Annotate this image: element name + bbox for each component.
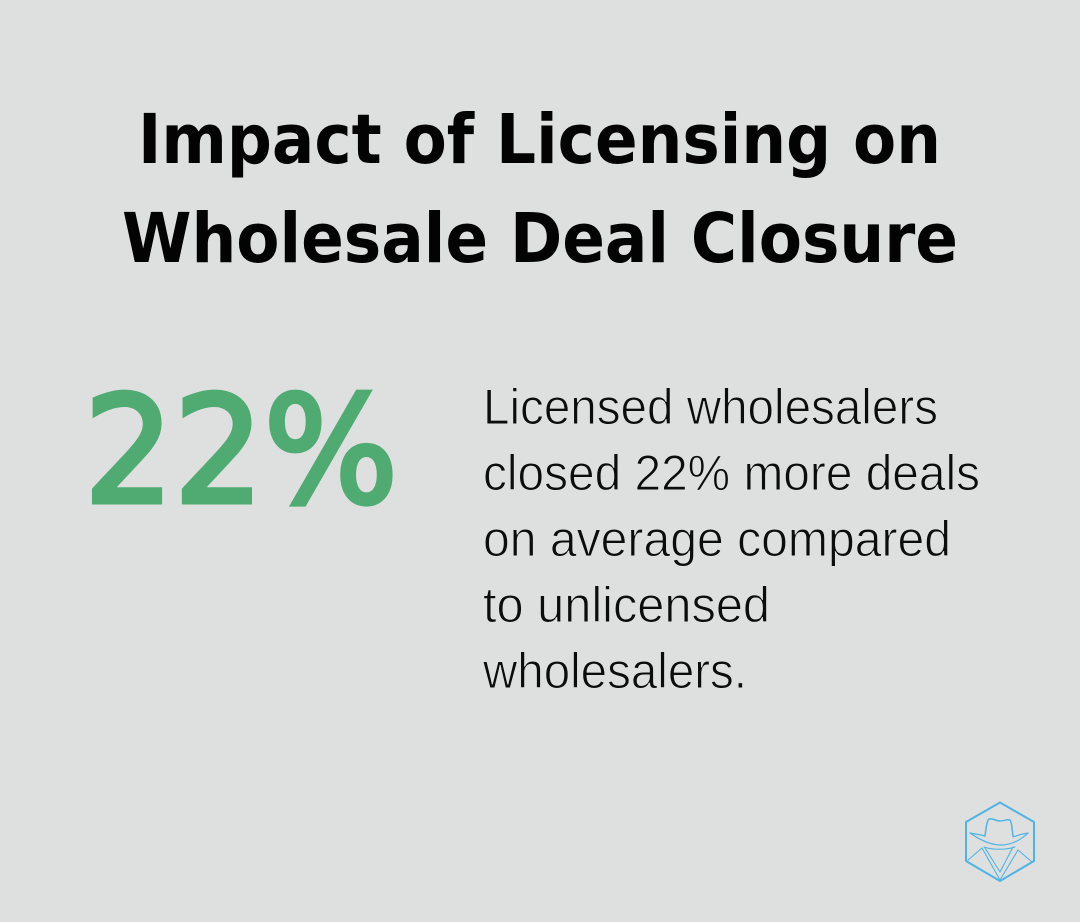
description text: wholesalers.	[482, 643, 747, 699]
hat brim	[970, 833, 1028, 845]
title: Wholesale Deal Closure	[122, 199, 958, 279]
title	[122, 100, 958, 279]
description text: to unlicensed	[483, 577, 770, 633]
hexagon outline	[966, 802, 1034, 881]
description text: Licensed wholesalers	[483, 379, 938, 435]
title: Impact of Licensing on	[138, 100, 941, 180]
hat crown	[985, 819, 1013, 836]
description text: on average compared	[483, 511, 951, 567]
big stat: 22%: 22%	[84, 365, 398, 537]
description text	[482, 379, 980, 699]
collar	[968, 847, 1032, 880]
icon: hexagon logo with hat and collar	[966, 802, 1034, 881]
description text: closed 22% more deals	[483, 445, 980, 501]
